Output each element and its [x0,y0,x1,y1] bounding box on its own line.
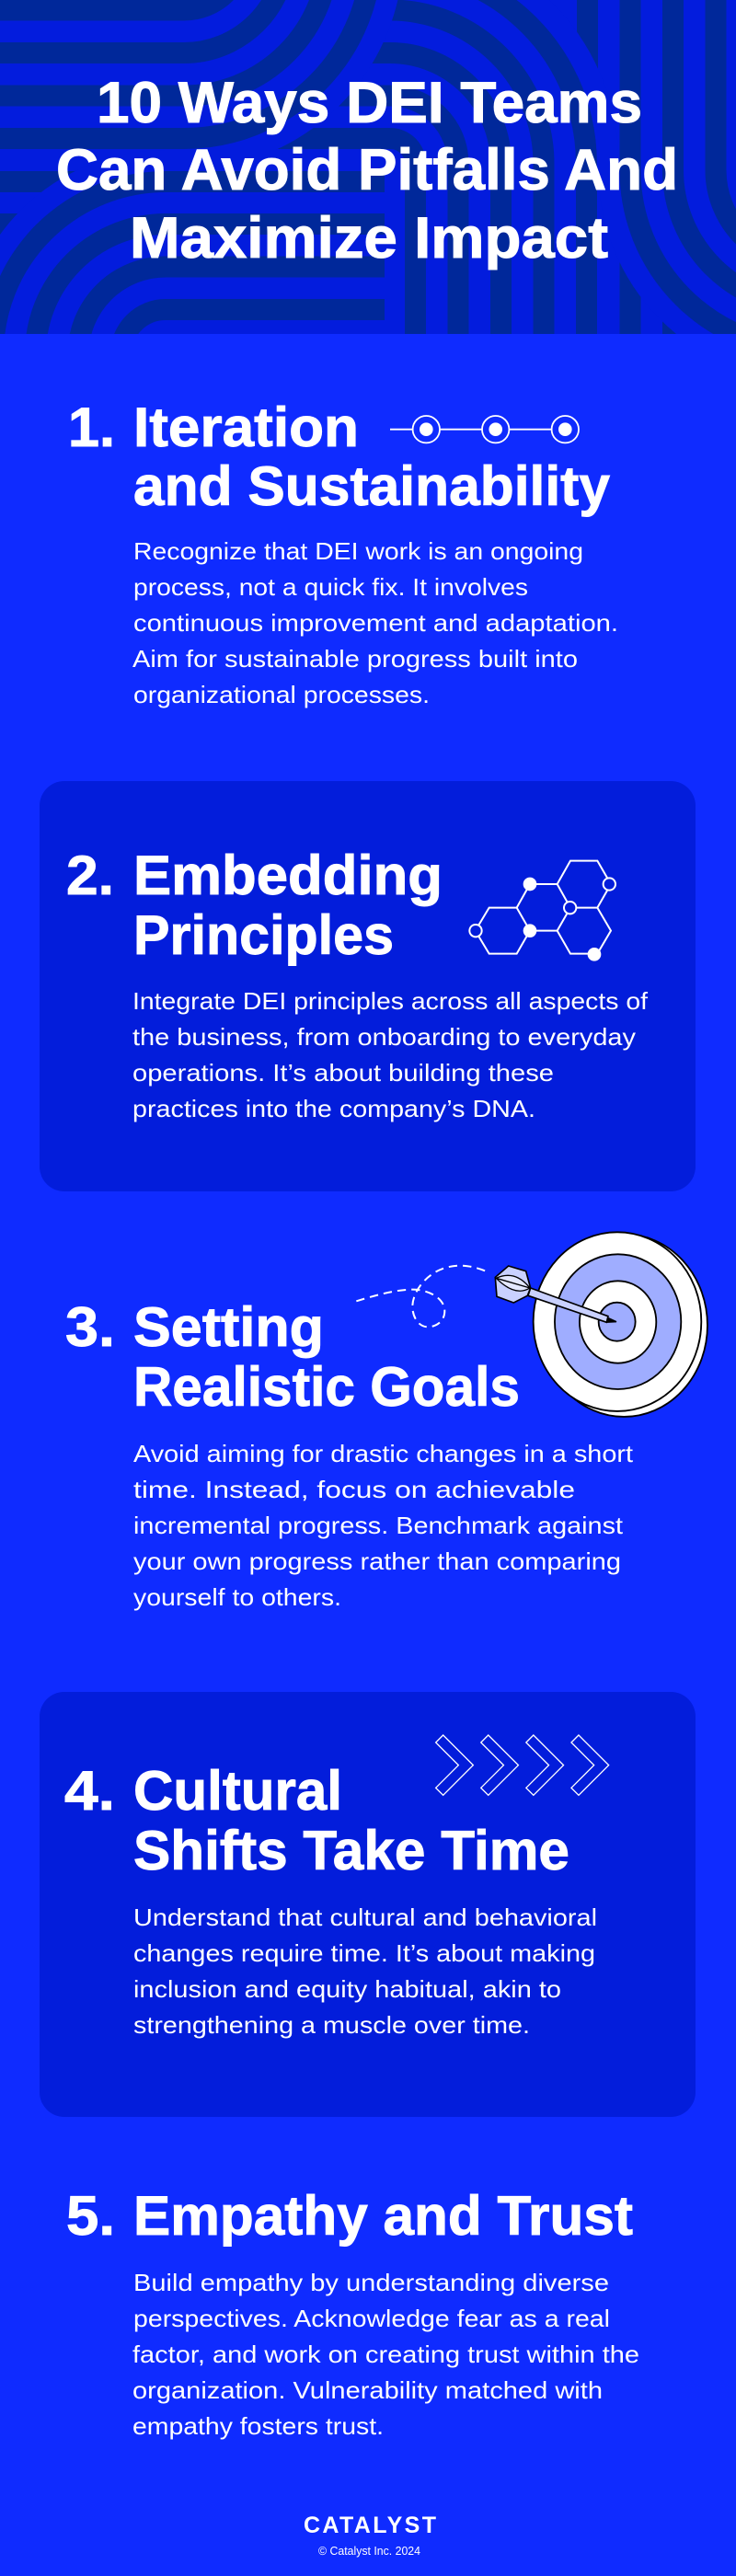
title: Maximize Impact [130,206,608,270]
footer: logo and copyright: CATALYST [304,2513,436,2538]
heading 4: Cultural [133,1760,342,1822]
body text 2: operations. It’s about building these [132,1059,554,1087]
heading 2: 2. [66,845,114,906]
body text 5: organization. Vulnerability matched with [132,2376,603,2404]
heading 1: and Sustainability [133,455,611,517]
panel: 3 setting realistic goals [65,1232,707,1611]
body text 4: strengthening a muscle over time. [133,2011,530,2039]
body text 3 [133,1440,634,1611]
title: 10 Ways DEI Teams [97,71,642,135]
heading 3 [65,1296,520,1418]
body text 3: Avoid aiming for drastic changes in a short [133,1440,634,1467]
body text 1: organizational processes. [133,681,430,708]
body text 2: the business, from onboarding to everyday [132,1023,636,1051]
heading 1: 1. [68,397,115,458]
body text 3: yourself to others. [133,1583,341,1611]
body text 3: incremental progress. Benchmark against [133,1512,624,1539]
body text 2: practices into the company’s DNA. [132,1095,535,1122]
heading 3: 3. [65,1296,115,1358]
body text 3: your own progress rather than comparing [133,1547,621,1575]
heading 4 [64,1760,569,1881]
title [56,71,678,270]
body text 5: perspectives. Acknowledge fear as a real [133,2305,610,2332]
body text 4: Understand that cultural and behavioral [133,1903,597,1931]
body text 4: changes require time. It’s about making [133,1939,595,1967]
body text 1: continuous improvement and adaptation. [133,609,618,637]
icon: connected dots timeline [390,416,579,443]
heading 3: Setting [133,1296,324,1358]
body text 4 [133,1903,597,2039]
body text 5: factor, and work on creating trust within the [132,2340,639,2368]
heading 2 [66,845,443,966]
heading 4: 4. [64,1760,115,1822]
icon: hexagon network [469,861,615,961]
heading 5: Empathy and Trust [133,2185,633,2247]
body text 1: Aim for sustainable progress built into [132,645,578,673]
heading 4: Shifts Take Time [133,1820,569,1881]
title: Can Avoid Pitfalls And [56,138,678,202]
heading 1 [68,397,611,517]
panel: 2 embedding principles [40,781,696,1191]
panel: 5 empathy and trust [66,2185,639,2440]
body text 1 [132,537,618,708]
heading 1: Iteration [133,397,359,458]
body text 3: time. Instead, focus on achievable [133,1476,575,1503]
footer: logo and copyright [304,2513,436,2558]
heading 5: 5. [66,2185,115,2247]
heading 2: Embedding [133,845,443,906]
body text 5 [132,2269,639,2440]
heading 2: Principles [133,904,394,966]
icon: four chevrons [436,1735,609,1795]
body text 5: Build empathy by understanding diverse [133,2269,609,2296]
heading 3: Realistic Goals [133,1356,520,1418]
body text 1: process, not a quick fix. It involves [133,573,528,601]
icon: dart and target [356,1232,707,1417]
body text 2 [132,987,649,1122]
footer: logo and copyright: © Catalyst Inc. 2024 [318,2545,420,2558]
header banner with striped pattern and title [0,0,736,371]
panel: 4 cultural shifts take time [40,1692,696,2117]
body text 1: Recognize that DEI work is an ongoing [133,537,583,565]
body text 4: inclusion and equity habitual, akin to [133,1975,561,2003]
panel: 1 iteration and sustainability [68,397,618,708]
body text 5: empathy fosters trust. [132,2412,384,2440]
body text 2: Integrate DEI principles across all aspects of [132,987,649,1015]
